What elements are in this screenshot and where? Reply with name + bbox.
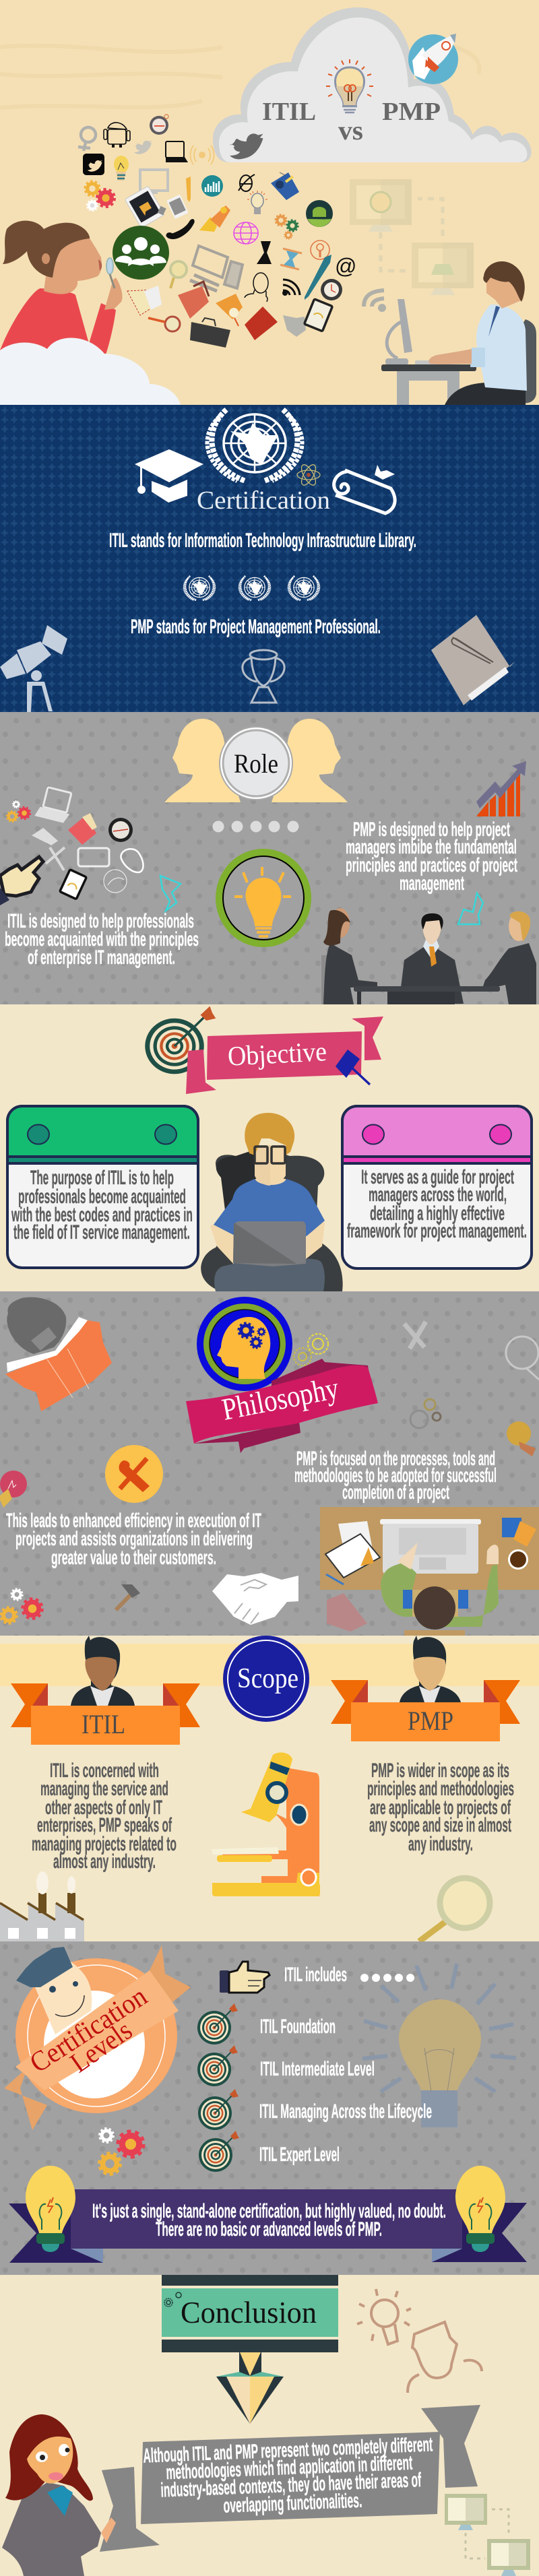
text: PMP objective: [347, 1166, 527, 1242]
icon: faded gears: [410, 1399, 441, 1428]
banner: philosophy: [186, 1359, 378, 1453]
text: ITIL scope: [32, 1760, 177, 1873]
icon: hourglass black: [257, 241, 272, 264]
section: philosophy: [0, 1291, 539, 1636]
list item: intermediate: ITIL Intermediate Level: [260, 2058, 375, 2080]
list item: foundation: [197, 2003, 336, 2044]
ribbon and person: PMP: [331, 1636, 520, 1741]
decorative dots: includes: [360, 1974, 414, 1982]
icons: blown bubble cluster: [78, 115, 356, 348]
text: ITIL philosophy: This leads to enhanced efficiency in execution of IT: [6, 1510, 261, 1532]
text: PMP role: [346, 818, 517, 895]
icon: handshake: [212, 1573, 298, 1625]
title: vs: vs: [338, 115, 363, 146]
icon: microscope: [212, 1752, 320, 1896]
icon: pointing hand: [220, 1962, 270, 1993]
text: ITIL scope: other aspects of only IT: [45, 1797, 162, 1819]
icon: pointing hand: [0, 857, 43, 905]
section: certification levels: [0, 1941, 539, 2275]
icon: clock: [321, 279, 342, 300]
icon: bulb in ring: [216, 849, 311, 947]
heading box: conclusion: [162, 2275, 338, 2352]
icon: team circle: [113, 226, 169, 280]
icon: head with gears: [197, 1297, 292, 1391]
icon: radio: [271, 172, 299, 200]
text: ITIL scope: enterprises, PMP speaks of: [37, 1814, 172, 1836]
icon: trophy: [243, 650, 284, 703]
icon: pink bulb: [0, 1471, 27, 1508]
icon: red briefcase: [178, 282, 209, 319]
icon: notebook: [431, 615, 515, 705]
icon: yellow gears: [294, 1334, 328, 1365]
text: ITIL objective: the field of IT service management.: [13, 1221, 190, 1244]
icon: orange bag: [216, 294, 243, 326]
text: ITIL philosophy: greater value to their customers.: [51, 1547, 216, 1569]
cloud: [213, 7, 532, 162]
card: PMP objective: [342, 1106, 532, 1268]
list item: managing across lifecycle: [198, 2089, 432, 2130]
badge: role: Role: [234, 748, 278, 779]
text: ITIL philosophy: projects and assists organizations in delivering: [15, 1528, 253, 1550]
heading box: conclusion: Conclusion: [181, 2295, 317, 2329]
badge: role: [219, 726, 293, 800]
icon: pencil: [186, 176, 191, 202]
text: ITIL objective: The purpose of ITIL is to help: [30, 1167, 174, 1189]
icon: hammer: [116, 1584, 140, 1610]
icon: magnifier orange: [148, 317, 180, 331]
banner: objective: [186, 1017, 383, 1094]
icon: black briefcase: [190, 318, 230, 348]
text: PMP certification: [92, 2200, 446, 2241]
icon: graduation cap: [135, 449, 203, 503]
label: ITIL: ITIL: [82, 1709, 125, 1739]
heading: certification: Certification: [197, 486, 330, 515]
table: [354, 986, 500, 992]
icon: light bulb: [326, 59, 373, 112]
icon: red book: [245, 307, 278, 340]
icon: growth chart: [476, 761, 526, 816]
icon: briefcase faded: [327, 1593, 367, 1632]
section: certification: [0, 405, 539, 712]
icon: signal rings: [190, 146, 214, 164]
text: conclusion: [143, 2433, 435, 2521]
icon: cloud outline: [121, 849, 144, 872]
icon: desktop computer: [190, 246, 243, 291]
banner: PMP certification: [9, 2189, 527, 2263]
text: ITIL role: [5, 910, 199, 969]
icon: gears: [7, 801, 30, 822]
icons: small emblems: [184, 576, 319, 600]
title: ITIL: ITIL: [262, 98, 316, 126]
icon: telescope: [0, 625, 67, 712]
text: ITIL philosophy: [6, 1510, 261, 1569]
icon: gears small: [276, 215, 298, 238]
icon: UN emblem large: [207, 410, 303, 481]
title: PMP: PMP: [382, 98, 441, 126]
person: right man: [482, 911, 536, 1004]
text: ITIL objective: professionals become acquainted: [18, 1186, 186, 1208]
banner: objective: Objective: [227, 1035, 327, 1072]
icon: head outline: [408, 2322, 482, 2393]
icon: yellow bulb: [114, 156, 129, 181]
person: man with laptop: [201, 1113, 343, 1293]
person: woman in suit: [2, 2414, 116, 2576]
icons: monitors: [445, 2494, 530, 2576]
icon: printer: [68, 813, 97, 845]
text: ITIL scope: almost any industry.: [53, 1850, 156, 1873]
person: woman: [321, 908, 377, 1004]
icon: tools: [46, 847, 65, 870]
ribbon and person: ITIL: [11, 1636, 200, 1745]
icon: phone outline: [78, 848, 109, 866]
icon: phone receiver: [167, 220, 193, 238]
icon: pen: [305, 255, 331, 300]
text: ITIL scope: managing the service and: [40, 1778, 168, 1800]
icon: mini microscope: [199, 205, 230, 232]
badge: scope: Scope: [237, 1663, 298, 1694]
icons: bottom gears: [1, 1589, 42, 1623]
text: ITIL objective: with the best codes and practices in: [11, 1204, 193, 1226]
icon: diploma scroll: [334, 465, 395, 513]
icon: bar chart circle: [201, 175, 223, 197]
person: centre man: [399, 913, 464, 1004]
list: certification levels: ITIL Foundation: [260, 2016, 336, 2038]
icon: gears: [85, 182, 115, 210]
card: ITIL objective: [7, 1106, 198, 1268]
cloud: bottom-left: [0, 338, 181, 405]
icon: gavel: [336, 1050, 370, 1085]
badge: certification levels mascot: Certification: [24, 1981, 153, 2079]
icon: female symbol: [78, 127, 96, 151]
illustration: desk from above: [320, 1507, 539, 1636]
icons: tech cluster: [0, 785, 144, 905]
section: conclusion: [0, 2275, 539, 2576]
icon: faded tools: [404, 1322, 426, 1349]
icon: tablet: [125, 186, 164, 228]
person: man at computer: [381, 261, 536, 405]
text: PMP scope: any industry.: [408, 1833, 473, 1855]
icon: tablet: [60, 870, 86, 899]
text: ITIL scope: ITIL is concerned with: [50, 1760, 159, 1782]
label: PMP: PMP: [408, 1706, 453, 1736]
text: PMP scope: [367, 1760, 514, 1855]
icon: phone ring: [104, 870, 127, 893]
icon: magnifier: [170, 261, 187, 288]
text: ITIL scope: managing projects related to: [32, 1833, 177, 1855]
icon: wifi black: [283, 280, 300, 295]
text: conclusion: overlapping functionalities.: [223, 2490, 362, 2517]
icon: letter: [127, 286, 162, 315]
arrow: cyan to left text: [160, 876, 181, 911]
icon: twitter square: [83, 154, 104, 175]
hero section: [0, 0, 539, 405]
icon: phone: [166, 195, 189, 219]
ribbon: conclusion: [100, 2405, 480, 2552]
icon: small bulb: [247, 191, 267, 214]
list item: expert: [199, 2131, 340, 2172]
banner: philosophy: Philosophy: [219, 1370, 342, 1427]
icon: rocket: [408, 34, 458, 84]
icon: at sign: @: [335, 254, 356, 278]
section: scope: [0, 1636, 539, 1941]
icon: orange bulb: [507, 1421, 536, 1456]
text: PMP role: management: [400, 872, 464, 895]
icon: light bulb faded: [362, 1964, 516, 2127]
people: business meeting: [321, 908, 536, 1004]
icon: factory: [0, 1871, 84, 1941]
text: ITIL role: ITIL is designed to help professionals: [7, 910, 194, 932]
icon: faded magnifier: [506, 1337, 539, 1380]
icon: person reading: [5, 1297, 112, 1411]
icons: gears: [100, 2129, 143, 2174]
person from above: [381, 1561, 499, 1627]
arrow: pointing down: [216, 2352, 284, 2424]
faded monitors: [350, 179, 474, 295]
list: certification levels: [197, 2003, 432, 2172]
list: certification levels: ITIL Expert Level: [259, 2144, 340, 2166]
icon: compass: [150, 115, 168, 135]
icon: envelope: [35, 830, 55, 843]
icon: android circle: [306, 200, 333, 227]
icon: atom: [297, 463, 320, 487]
section: role: [0, 712, 539, 1004]
icon: alarm clock: [108, 818, 133, 842]
icon: hourglass orange: [280, 249, 302, 269]
icon: magnifier: [419, 1878, 490, 1941]
icon: waving hand: [283, 315, 306, 337]
arrow: cyan to people: [458, 893, 483, 924]
person: woman blowing icons: [0, 221, 123, 364]
icon: browser logo: [239, 174, 255, 191]
badge: certification levels mascot: Levels: [65, 2015, 138, 2079]
text: ITIL includes: ITIL includes: [284, 1964, 347, 1986]
icon: wifi tablet: [305, 299, 332, 331]
icon: twitter bird in cloud: [230, 133, 263, 159]
icon: bulb outline: [357, 2289, 411, 2344]
icon: tools badge: [105, 1445, 163, 1503]
text: ITIL role: of enterprise IT management.: [28, 946, 175, 969]
badge: scope: [223, 1636, 309, 1722]
badge: certification levels mascot: [4, 1945, 191, 2130]
decorative dots: role: [213, 820, 299, 833]
icon: target: [145, 1006, 216, 1074]
text: PMP philosophy: [294, 1448, 497, 1504]
text: ITIL role: become acquainted with the principles: [5, 928, 199, 951]
icon: android outline: [104, 123, 130, 148]
icon: gray monitor: [140, 170, 168, 194]
icon: laptop: [166, 141, 188, 162]
text: ITIL objective: [11, 1167, 193, 1244]
icon: left banner bulb: [26, 2166, 75, 2252]
icon: globe: [234, 222, 258, 244]
icon: two heads: [164, 719, 348, 802]
icon: right banner bulb: [455, 2166, 505, 2252]
section: objective: [0, 1004, 539, 1293]
list item: intermediate: [197, 2045, 375, 2086]
icon: person outline: [245, 273, 268, 302]
icon: search circle: [311, 240, 329, 259]
icon: laptop: [34, 785, 75, 824]
icon: wifi: [364, 290, 384, 310]
icon: faded bird: [134, 141, 152, 154]
